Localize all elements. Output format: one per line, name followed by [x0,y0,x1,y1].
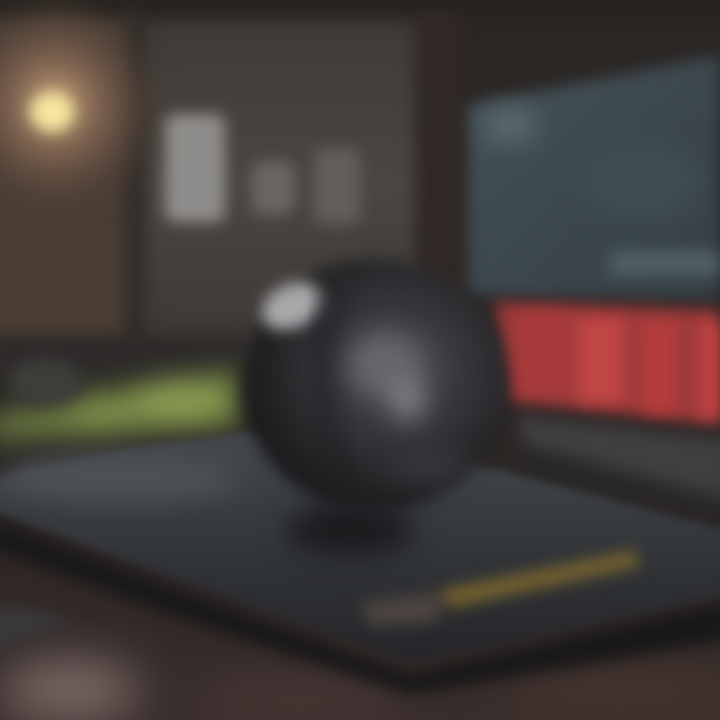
wall lamp glow [0,0,160,215]
wooden foreground table [0,500,720,720]
table light reflection [0,660,720,720]
dark shelf below the wall [0,335,245,380]
gold strip on desk [360,550,640,626]
dark layered surfaces at right [515,415,720,525]
sphere soft groove [321,285,345,495]
dark object on shelf [7,358,83,406]
slate desk surface [0,432,720,662]
dark wooden pillars [124,10,465,360]
sphere central sheen [347,333,470,481]
sphere highlight [254,273,330,339]
small dark pad at lower left [0,605,75,650]
red striped band [495,302,720,425]
sphere [243,259,507,511]
green foliage band [0,368,240,440]
blurred white wall panels [165,114,360,224]
window with slate-blue view [468,55,720,300]
sphere contact shadow [285,504,415,556]
shadow under desk edge [0,520,720,695]
